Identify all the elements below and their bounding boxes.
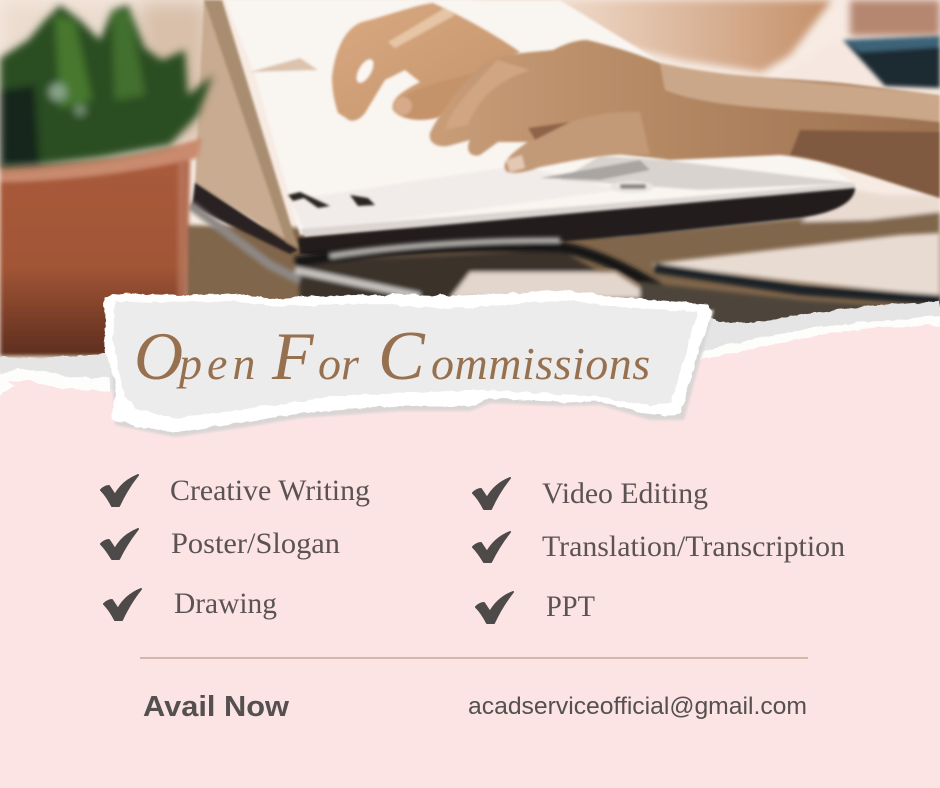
laptop dark underside [298,188,855,258]
services list: right column [473,477,845,623]
video editing: Video Editing [542,477,708,510]
title text: O [134,318,183,394]
paper shadow [108,300,714,437]
laptop screen back [192,0,298,254]
check: translation [473,532,510,562]
white torn paper [104,290,712,432]
cables and devices [190,205,940,340]
gray torn paper face [113,300,698,418]
background figure [476,0,940,76]
check: drawing [104,589,141,620]
wooden table [184,190,940,308]
dark bowl [843,36,940,88]
avail now: Avail Now [143,691,289,723]
poster/slogan: Poster/Slogan [171,527,340,560]
right hand and arm [430,40,940,198]
wall behind plant [0,0,210,150]
check: ppt [476,592,513,623]
services list: left column [101,474,370,620]
drawing: Drawing [174,587,277,620]
creative writing: Creative Writing [170,474,370,507]
ppt: PPT [546,590,595,623]
email: acadserviceofficial@gmail.com [468,693,807,720]
plant pot [0,138,202,356]
torn gray paper band [0,296,940,420]
title text: C [378,318,426,395]
background photo: laptop, hands and plant [0,0,940,380]
left hand [332,3,520,121]
check: creative writing [101,475,138,506]
title text: pen [176,338,260,389]
title text: F [271,318,315,394]
check: poster [101,529,138,559]
title text: or [318,338,360,389]
title paper [104,290,714,437]
laptop keyboard deck [225,0,858,238]
title text: ommissions [431,338,651,389]
succulent plant [0,5,213,168]
torn white paper edge [0,315,940,420]
key glyphs [288,192,375,208]
pink background panel [0,325,940,788]
check: video editing [473,478,510,509]
footer [140,658,808,723]
translation/transcription: Translation/Transcription [542,530,845,563]
